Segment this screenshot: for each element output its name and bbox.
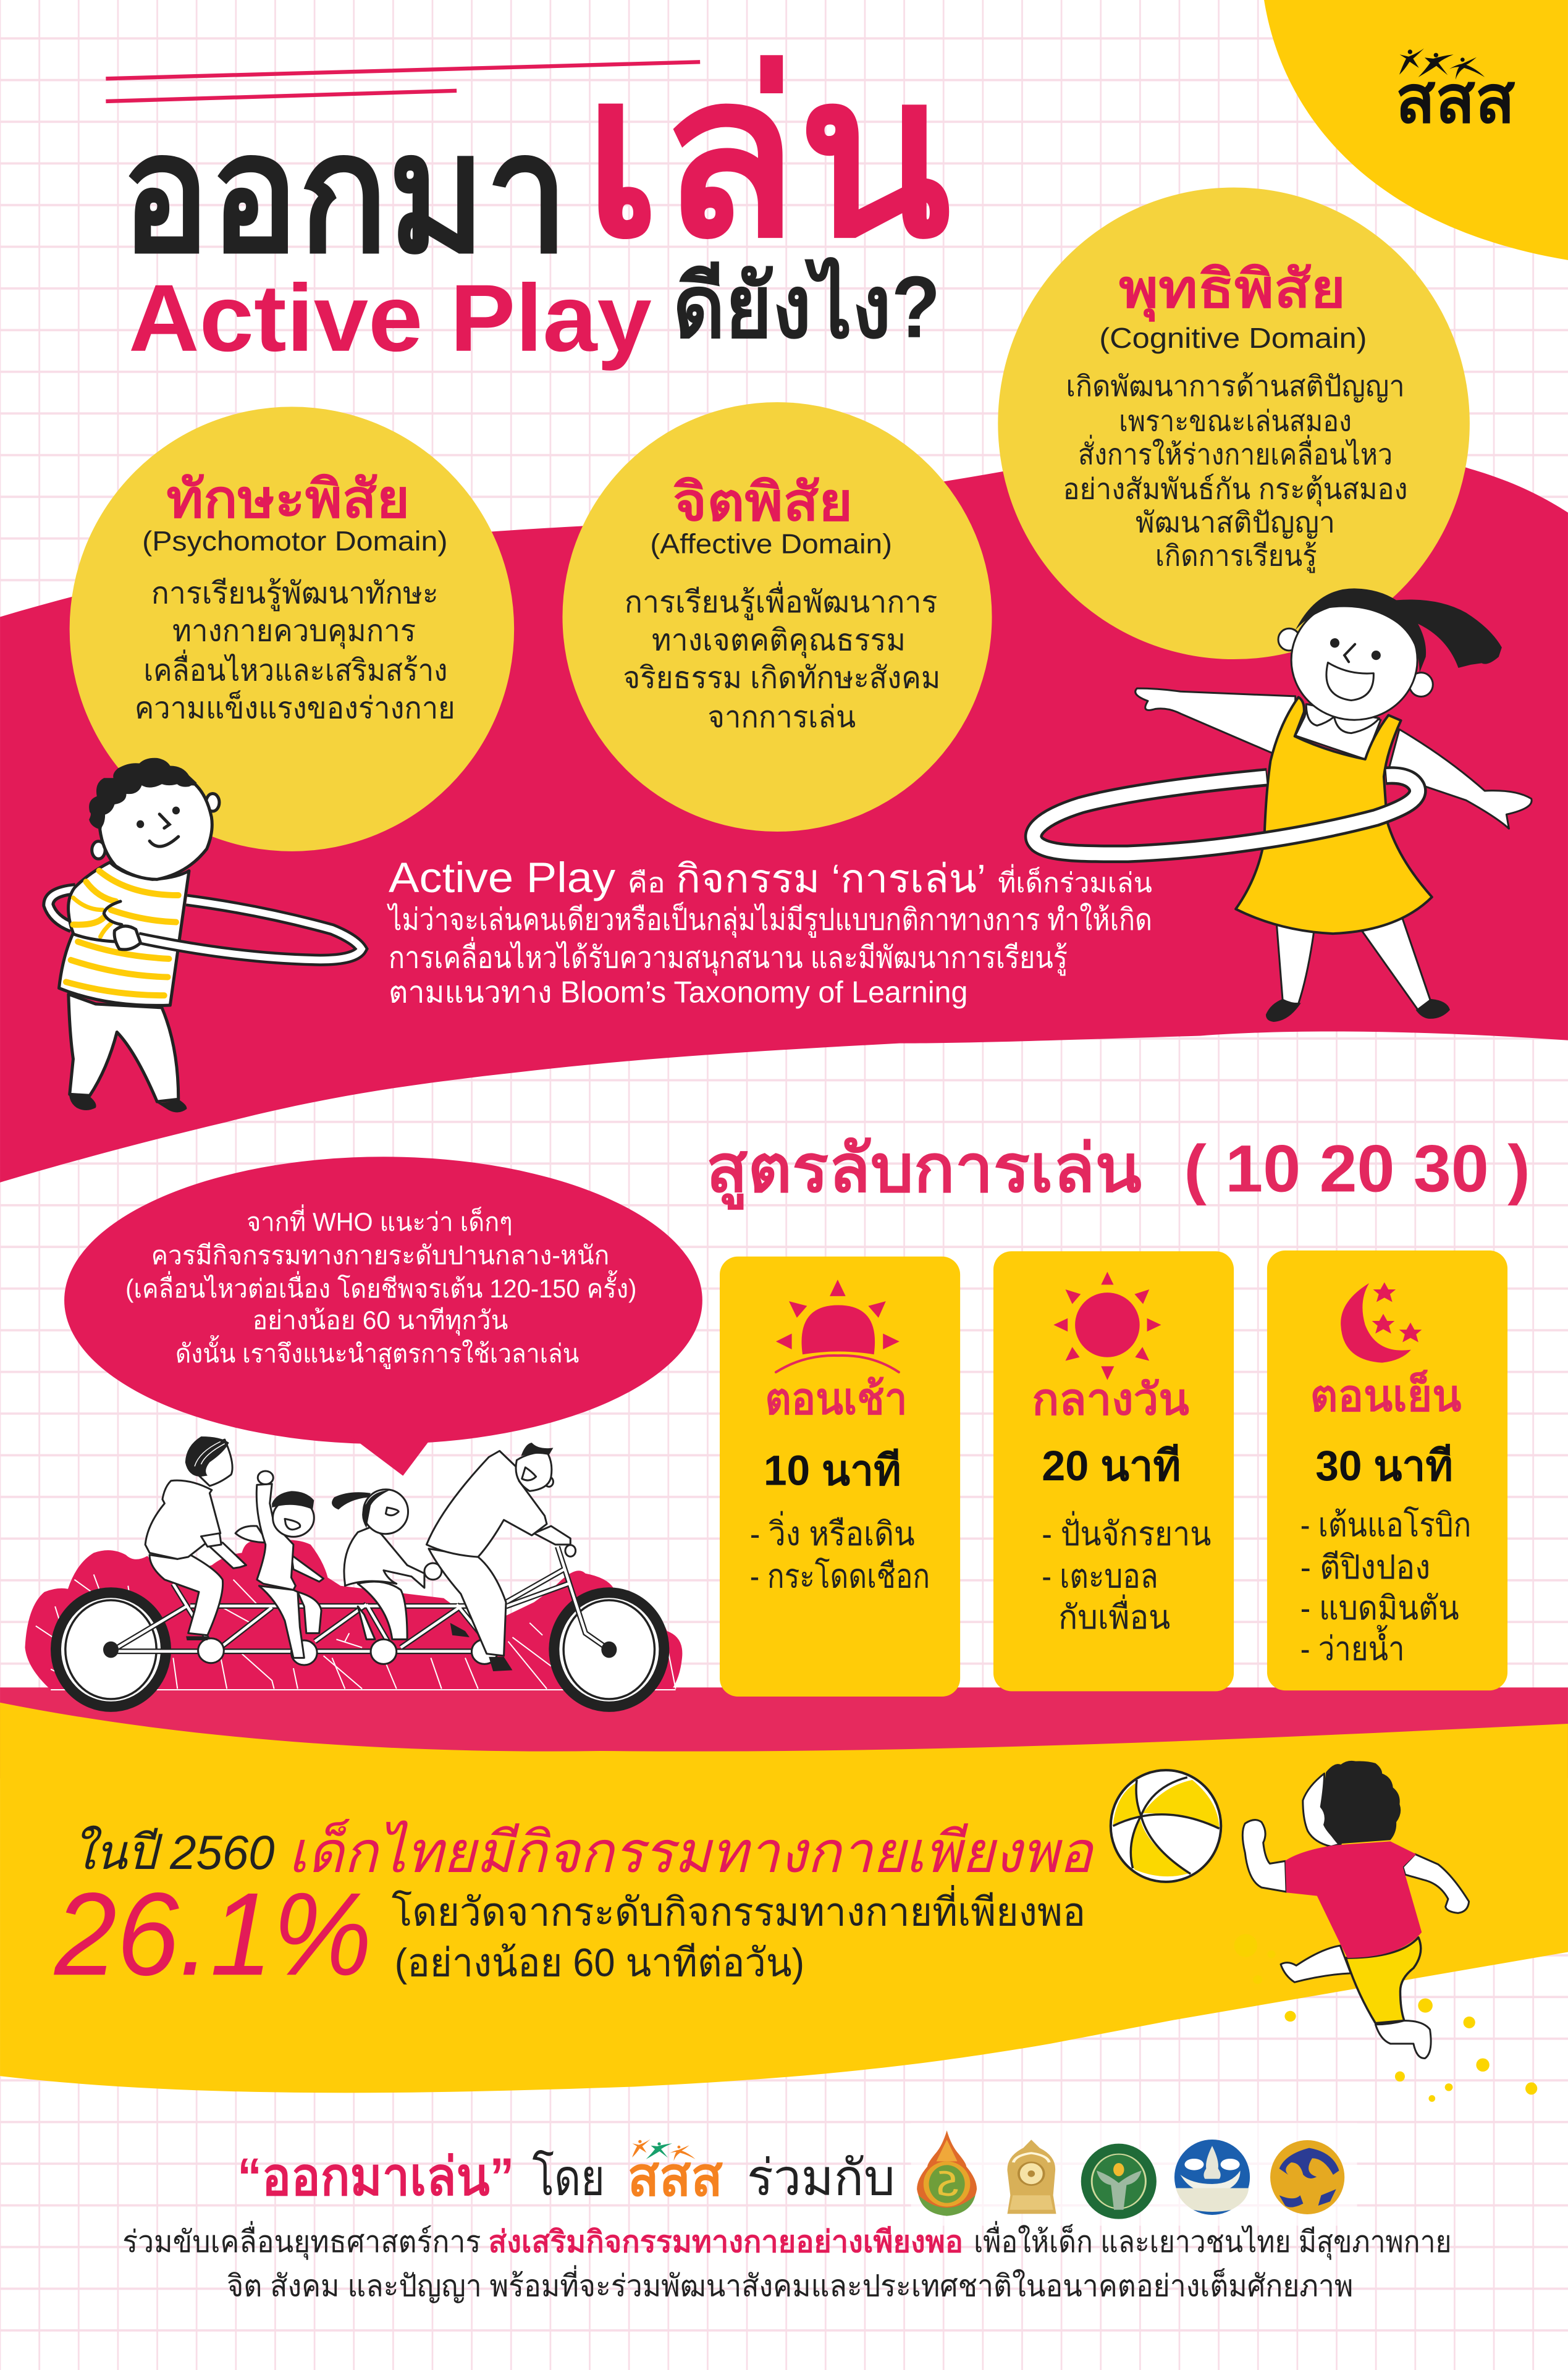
panel: cognitive domain circle: อย่างสัมพันธ์กัน กระตุ้นสมอง: [1063, 473, 1408, 507]
partner logo 2: [1007, 2140, 1056, 2214]
partner logo 3: [1081, 2144, 1157, 2219]
footer text: จิต สังคม และปัญญา พร้อมที่จะร่วมพัฒนาสังคมและประเทศชาติในอนาคตอย่างเต็มศักยภาพ: [227, 2266, 1353, 2303]
heading: play formula: ( 10 20 30 ): [1184, 1132, 1530, 1206]
definition paragraph: active play: Active Play: [389, 854, 616, 901]
rider: boy: [256, 1471, 324, 1658]
partner logos: [917, 2130, 1344, 2219]
panel: cognitive domain circle: สั่งการให้ร่างกายเคลื่อนไหว: [1078, 434, 1393, 470]
panel: cognitive domain circle: เพราะขณะเล่นสมอง: [1119, 405, 1352, 437]
illustration: girl with hoop: [1034, 588, 1532, 1022]
definition paragraph: active play: คือ: [628, 868, 665, 898]
panel: cognitive domain circle: เกิดการเรียนรู้: [1155, 539, 1317, 573]
card: morning: ตอนเช้า: [765, 1375, 907, 1423]
partner logo 5: [1270, 2140, 1344, 2214]
card: morning: 10 นาที: [764, 1446, 901, 1494]
panel: cognitive domain circle: [998, 187, 1470, 659]
footer heading with partner logos: โดย: [533, 2150, 605, 2206]
panel: psychomotor domain circle: เคลื่อนไหวและเสริมสร้าง: [144, 649, 447, 687]
sss logo top right: สสส: [1396, 62, 1515, 137]
partner logo 4: [1174, 2140, 1250, 2215]
card: evening: [1267, 1250, 1507, 1690]
icon: moon and stars: [1341, 1283, 1422, 1363]
rider: girl: [332, 1490, 424, 1639]
panel: affective domain circle: การเรียนรู้เพื่อพัฒนาการ: [625, 581, 937, 620]
card: midday: - ปั่นจักรยาน: [1042, 1511, 1211, 1553]
panel: affective domain circle: จริยธรรม เกิดทักษะสังคม: [623, 662, 940, 695]
card: evening: ตอนเย็น: [1310, 1369, 1461, 1420]
footer text: ส่งเสริมกิจกรรมทางกายอย่างเพียงพอ: [489, 2225, 963, 2259]
panel: affective domain circle: (Affective Domain): [650, 529, 892, 560]
wheels: [56, 1593, 664, 1706]
panel: psychomotor domain circle: (Psychomotor Domain): [142, 526, 447, 557]
statistic: 26.1 percent: โดยวัดจากระดับกิจกรรมทางกายที่เพียงพอ: [392, 1885, 1085, 1934]
panel: affective domain circle: [562, 402, 992, 832]
speech bubble: จากที่ WHO แนะว่า เด็กๆ: [247, 1204, 513, 1236]
definition paragraph: active play: การเคลื่อนไหวได้รับความสนุกสนาน และมีพัฒนาการเรียนรู้: [389, 937, 1068, 976]
definition paragraph: active play: กิจกรรม ‘การเล่น’: [676, 857, 986, 901]
definition paragraph: active play: [387, 854, 1152, 1010]
icon: sunrise: [776, 1280, 900, 1372]
speech bubble: (เคลื่อนไหวต่อเนื่อง โดยชีพจรเต้น 120-150 ครั้ง): [125, 1270, 636, 1303]
illustration: boy with hoop: [48, 758, 361, 1113]
footer heading with partner logos: “ออกมาเล่น”: [237, 2148, 514, 2207]
definition paragraph: active play: ที่เด็กร่วมเล่น: [998, 864, 1152, 898]
card: morning: [720, 1257, 960, 1697]
panel: psychomotor domain circle: [70, 407, 514, 851]
card: midday: [993, 1251, 1234, 1691]
illustration: family on tandem bicycle: [25, 1436, 682, 1706]
magenta wave band: [0, 444, 1568, 1183]
bottom magenta strip: [0, 1687, 1568, 1778]
panel: affective domain circle: จากการเล่น: [707, 701, 856, 734]
speech bubble: อย่างน้อย 60 นาทีทุกวัน: [253, 1305, 508, 1336]
title: ดียังไง?: [673, 257, 940, 356]
title: เล่น: [584, 29, 952, 282]
heading: play formula: สูตรลับการเล่น: [706, 1132, 1142, 1210]
yellow corner shape: [1264, 0, 1568, 260]
card: evening: - ตีปิงปอง: [1300, 1549, 1430, 1586]
rider: mother: [145, 1436, 246, 1640]
title: Active Play: [129, 264, 652, 371]
definition paragraph: active play: ตามแนวทาง Bloom’s Taxonomy of Learning: [389, 976, 967, 1010]
card: midday: 20 นาที: [1042, 1442, 1181, 1490]
card: evening: - ว่ายน้ำ: [1300, 1625, 1405, 1668]
panel: psychomotor domain circle: ทางกายควบคุมการ: [172, 615, 416, 649]
card: morning: - วิ่ง หรือเดิน: [750, 1511, 915, 1553]
panel: affective domain circle: จิตพิสัย: [673, 473, 853, 532]
footer heading with partner logos: ร่วมกับ: [747, 2151, 895, 2206]
partner logo 1: [917, 2130, 977, 2216]
panel: psychomotor domain circle: ความแข็งแรงของร่างกาย: [135, 689, 455, 725]
card: evening: 30 นาที: [1315, 1442, 1453, 1490]
panel: psychomotor domain circle: ทักษะพิสัย: [166, 470, 410, 529]
footer heading with partner logos: [237, 2123, 1357, 2226]
statistic: 26.1 percent: 26.1%: [53, 1868, 372, 2000]
rider: father: [424, 1443, 576, 1671]
speech bubble: ดังนั้น เราจึงแนะนำสูตรการใช้เวลาเล่น: [175, 1335, 579, 1369]
card: evening: - แบดมินตัน: [1300, 1590, 1459, 1627]
panel: affective domain circle: ทางเจตคติคุณธรรม: [652, 623, 906, 658]
statistic: 26.1 percent: เด็กไทยมีกิจกรรมทางกายเพียงพอ: [288, 1819, 1095, 1884]
heading: play formula: [706, 1132, 1530, 1210]
title: [106, 29, 952, 371]
panel: cognitive domain circle: พุทธิพิสัย: [1119, 259, 1346, 322]
panel: cognitive domain circle: พัฒนาสติปัญญา: [1136, 506, 1335, 538]
panel: cognitive domain circle: (Cognitive Domain): [1099, 322, 1367, 354]
panel: psychomotor domain circle: การเรียนรู้พัฒนาทักษะ: [151, 576, 439, 611]
footer text: เพื่อให้เด็ก และเยาวชนไทย มีสุขภาพกาย: [974, 2221, 1452, 2260]
footer text: ร่วมขับเคลื่อนยุทธศาสตร์การ: [122, 2221, 481, 2260]
logo: sss orange: สสส: [628, 2146, 723, 2208]
card: midday: กับเพื่อน: [1058, 1594, 1170, 1636]
speech bubble: ควรมีกิจกรรมทางกายระดับปานกลาง-หนัก: [151, 1241, 609, 1270]
card: midday: - เตะบอล: [1042, 1558, 1158, 1595]
footer text: [122, 2221, 1452, 2303]
illustration: child chasing ball: [1111, 1761, 1537, 2102]
panel: cognitive domain circle: เกิดพัฒนาการด้านสติปัญญา: [1066, 370, 1405, 402]
icon: sun: [1053, 1271, 1161, 1380]
statistic: 26.1 percent: (อย่างน้อย 60 นาทีต่อวัน): [395, 1941, 804, 1985]
statistic: 26.1 percent: ในปี 2560: [72, 1825, 274, 1879]
title: ออกมา: [121, 101, 568, 287]
speech bubble: [64, 1157, 702, 1476]
yellow wave band: [0, 1703, 1568, 2093]
card: evening: - เต้นแอโรบิก: [1300, 1506, 1471, 1544]
statistic: 26.1 percent: [53, 1819, 1095, 2000]
card: morning: - กระโดดเชือก: [750, 1558, 930, 1595]
card: midday: กลางวัน: [1032, 1376, 1189, 1425]
definition paragraph: active play: ไม่ว่าจะเล่นคนเดียวหรือเป็นกลุ่มไม่มีรูปแบบกติกาทางการ ทำให้เกิด: [387, 901, 1152, 938]
